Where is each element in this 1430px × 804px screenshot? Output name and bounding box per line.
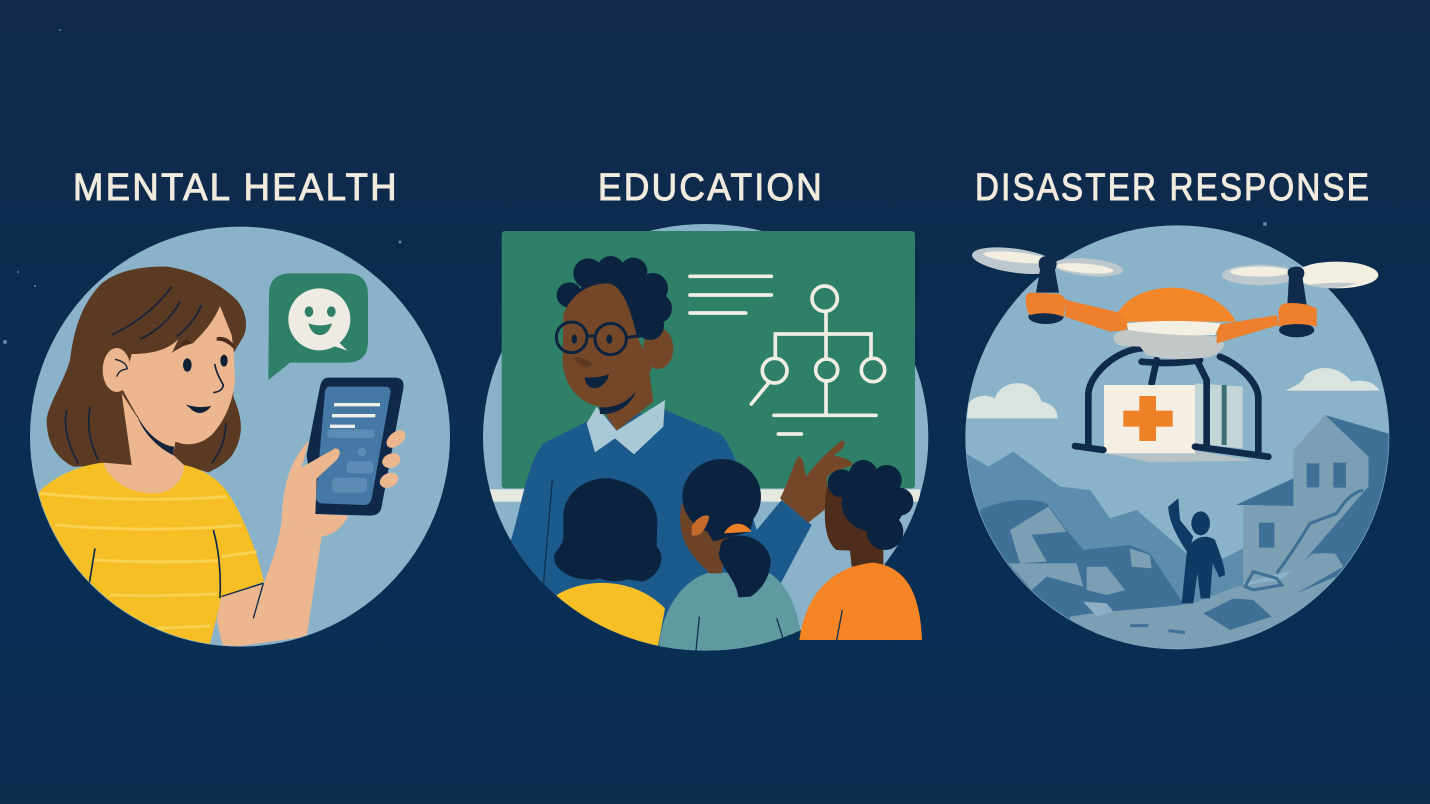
heading: mental health: MENTAL HEALTH [73, 167, 399, 209]
heading: education: EDUCATION [598, 167, 824, 209]
smartphone [307, 378, 404, 516]
collar [587, 400, 665, 454]
tree diagram [751, 286, 885, 415]
background stars [3, 29, 1267, 344]
rubble [980, 487, 1393, 653]
student: orange shirt and head [799, 460, 922, 640]
chalk ledge [487, 489, 920, 502]
face features [115, 355, 228, 455]
student head: ponytail [680, 459, 771, 597]
distant mountains [960, 450, 1243, 653]
building [1236, 415, 1393, 583]
speech bubble icon [268, 273, 368, 380]
teacher sweater [510, 410, 812, 653]
woman's hair [47, 267, 246, 472]
board notes [690, 276, 801, 434]
eyebrows [172, 337, 234, 353]
woman's neck [103, 393, 184, 494]
drone propellers [970, 243, 1378, 288]
ear [103, 348, 131, 392]
drone body [1026, 288, 1317, 359]
hair strands [66, 287, 226, 463]
yellow striped shirt [33, 463, 264, 653]
teacher neck [600, 353, 653, 431]
arm [217, 520, 322, 648]
medical box [1104, 383, 1253, 462]
cargo frame front [1075, 347, 1268, 457]
panel: disaster response illustration [960, 225, 1393, 653]
heading: disaster response: DISASTER RESPONSE [975, 167, 1371, 209]
clouds [963, 383, 1057, 418]
teacher hair [557, 256, 672, 340]
chalkboard [502, 231, 915, 488]
hand [282, 427, 409, 537]
woman's face [123, 306, 235, 444]
glasses and features [556, 322, 647, 388]
cargo frame [1088, 348, 1258, 452]
student: teal shirt [658, 572, 803, 653]
rotor masts [1036, 256, 1307, 305]
teacher face [563, 283, 652, 407]
infographic canvas [3, 29, 1390, 651]
student head: yellow shirt [554, 478, 661, 582]
person waving [1168, 498, 1225, 603]
panel: mental health illustration [30, 227, 450, 653]
student: yellow shirt [557, 583, 665, 653]
teacher ear [643, 328, 673, 369]
neck shadow [599, 390, 637, 414]
panel: education illustration [483, 224, 928, 653]
teacher hand [780, 441, 853, 523]
